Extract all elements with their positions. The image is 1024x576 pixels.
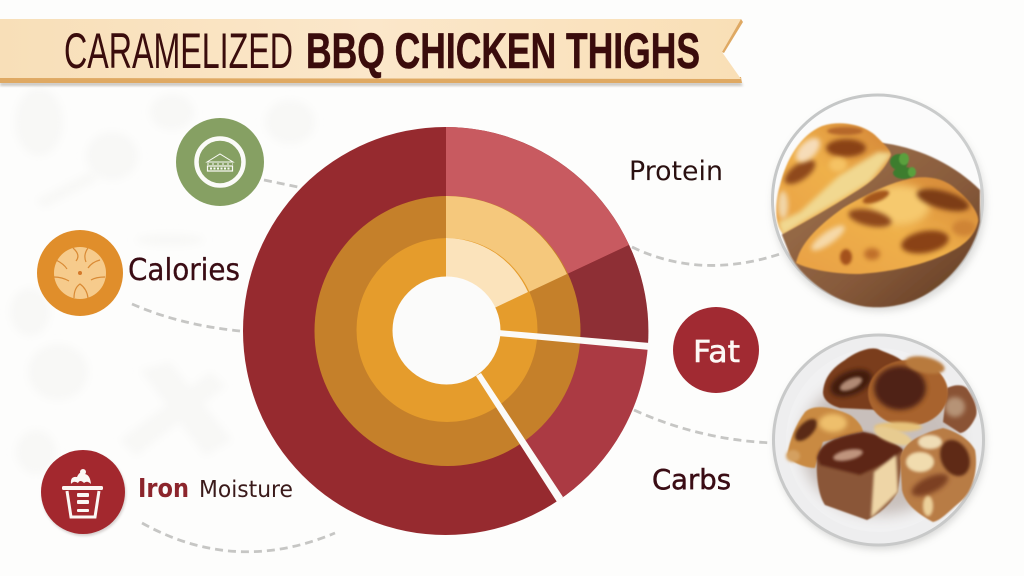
title ribbon: [0, 19, 743, 86]
piece center top: [868, 353, 948, 432]
middle ring: [314, 196, 580, 466]
segment: carbs: [446, 331, 648, 497]
inner ring highlight: [446, 238, 528, 331]
center hole: [392, 276, 500, 384]
middle ring highlight: [446, 196, 567, 331]
label: calories: Calories: [128, 253, 240, 288]
icon: orange citrus badge: [37, 230, 123, 316]
badge: fat: [673, 307, 759, 393]
segment: fat: [446, 245, 648, 345]
inner ring: [356, 238, 538, 422]
icon: red bucket badge: [41, 450, 126, 536]
badge: fat: Fat: [693, 335, 740, 370]
photo: chicken on wooden board: [772, 95, 985, 311]
piece center cream: [872, 423, 914, 449]
icon: green house badge: [176, 118, 264, 206]
label: moisture: Moisture: [199, 477, 293, 503]
label: protein: Protein: [629, 156, 723, 187]
label: iron: Iron: [138, 474, 189, 504]
title emphasis: BBQ CHICKEN THIGHS: [306, 23, 700, 79]
title: CARAMELIZED: [64, 23, 293, 79]
chicken piece two: [796, 177, 978, 274]
gap one: [498, 330, 650, 350]
piece top left: [823, 348, 905, 410]
photo: chicken pieces on white plate: [774, 335, 985, 549]
segment: protein: [446, 127, 629, 331]
piece front center: [817, 432, 903, 520]
connector lines: [132, 180, 780, 552]
piece back right: [943, 385, 977, 433]
gap two: [476, 373, 563, 502]
piece front right: [900, 428, 976, 522]
chicken piece one: [776, 123, 893, 236]
sunburst chart: [243, 127, 650, 535]
piece left: [786, 407, 863, 468]
label: carbs: Carbs: [652, 463, 731, 496]
